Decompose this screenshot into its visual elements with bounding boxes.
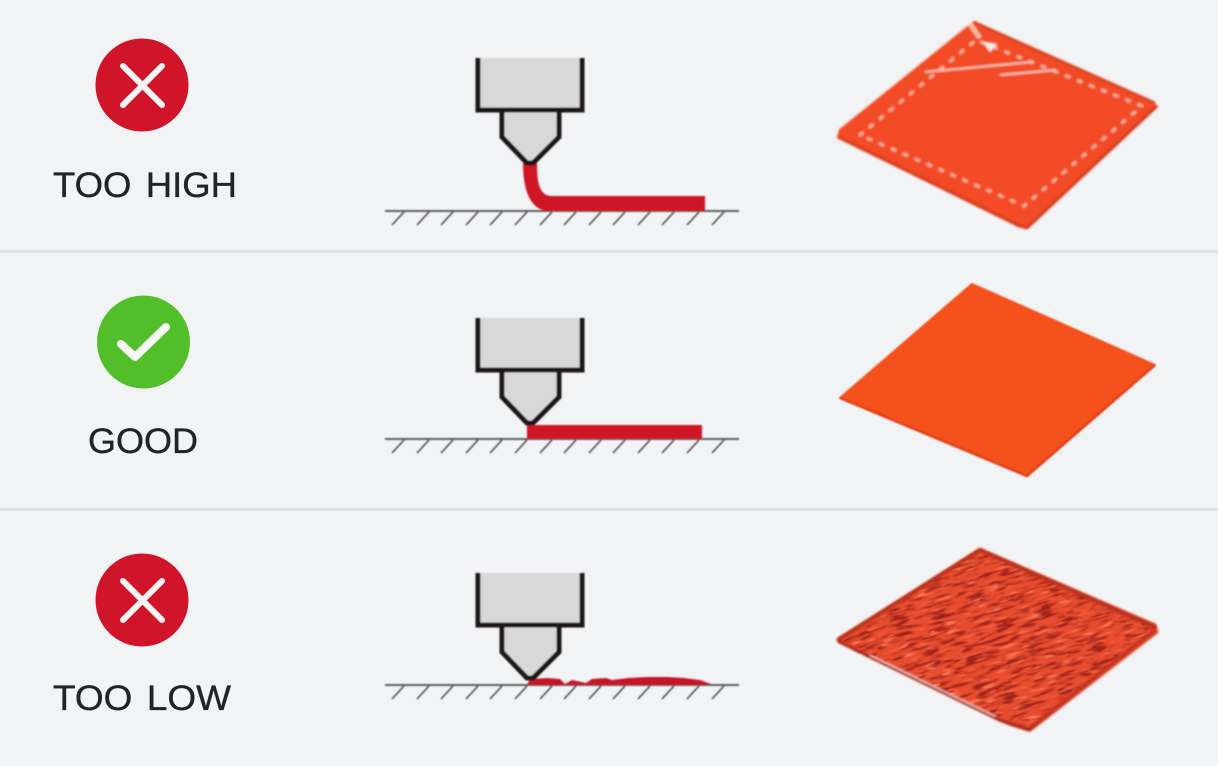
label: good: GOOD <box>88 422 198 461</box>
printed square: good <box>840 284 1155 476</box>
nozzle diagram: too low <box>385 573 739 699</box>
panel: too high <box>53 22 1157 228</box>
icon: red cross <box>96 38 188 132</box>
label: too high: TOO HIGH <box>53 166 237 205</box>
panel: good <box>88 284 1155 476</box>
printed square: too low <box>824 507 1175 766</box>
nozzle diagram: good <box>385 318 739 453</box>
icon: green check <box>97 296 190 388</box>
label: too low: TOO LOW <box>53 679 231 718</box>
panel: too low <box>53 507 1175 766</box>
printed square: too high <box>838 22 1157 228</box>
nozzle diagram: too high <box>385 58 739 225</box>
icon: red cross <box>96 554 188 646</box>
